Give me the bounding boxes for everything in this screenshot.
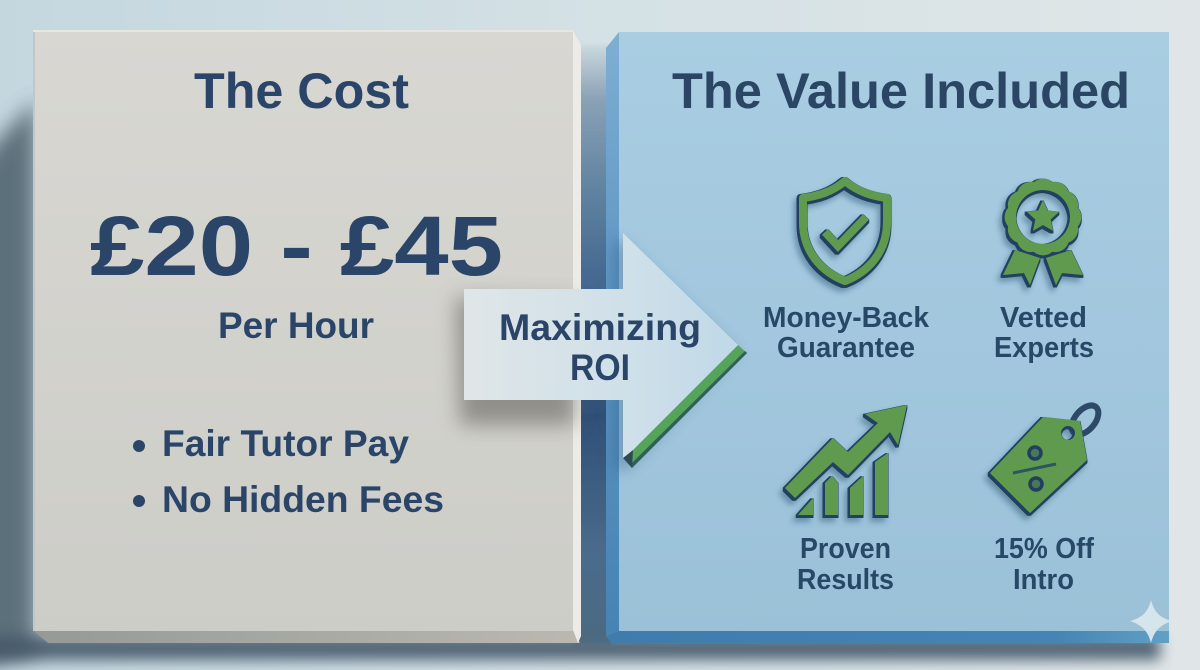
arrow face [464, 233, 738, 458]
icon: shield with check [803, 181, 887, 281]
label: money-back guarantee: Money-Back [763, 302, 930, 334]
label: proven results [797, 533, 894, 596]
label: 15% off intro: 15% Off [994, 533, 1094, 565]
label: vetted experts: Vetted [1000, 302, 1087, 334]
panel: the cost [33, 30, 581, 643]
panel body: cost slab [33, 30, 581, 643]
bullet list [133, 423, 444, 520]
per hour label: Per Hour [218, 305, 374, 346]
label: vetted experts: Experts [994, 332, 1094, 364]
arrow green edge [623, 345, 747, 468]
heading: the value included: The Value Included [672, 63, 1130, 119]
label: money-back guarantee [763, 302, 930, 364]
arrow label: Maximizing [499, 307, 701, 348]
panel body: value slab [606, 32, 1169, 643]
icon: award rosette with star [1003, 179, 1083, 285]
label: 15% off intro: Intro [1013, 564, 1074, 596]
price range: £20 - £45 [90, 199, 503, 293]
icon: rising chart arrow [785, 405, 907, 515]
bullet list: Fair Tutor Pay [162, 423, 409, 464]
bullet list: No Hidden Fees [162, 479, 444, 520]
arrow label: ROI [570, 347, 630, 388]
panel: the value included [606, 32, 1169, 643]
label: proven results: Proven [800, 533, 891, 565]
icon: sparkle watermark [1130, 600, 1172, 643]
arrow label [499, 307, 701, 388]
heading: the cost: The Cost [194, 63, 409, 119]
label: 15% off intro [994, 533, 1094, 596]
icon: discount price tag [990, 401, 1104, 513]
label: vetted experts [994, 302, 1094, 364]
label: proven results: Results [797, 564, 894, 596]
label: money-back guarantee: Guarantee [777, 332, 915, 364]
arrow: maximizing roi [456, 233, 747, 470]
